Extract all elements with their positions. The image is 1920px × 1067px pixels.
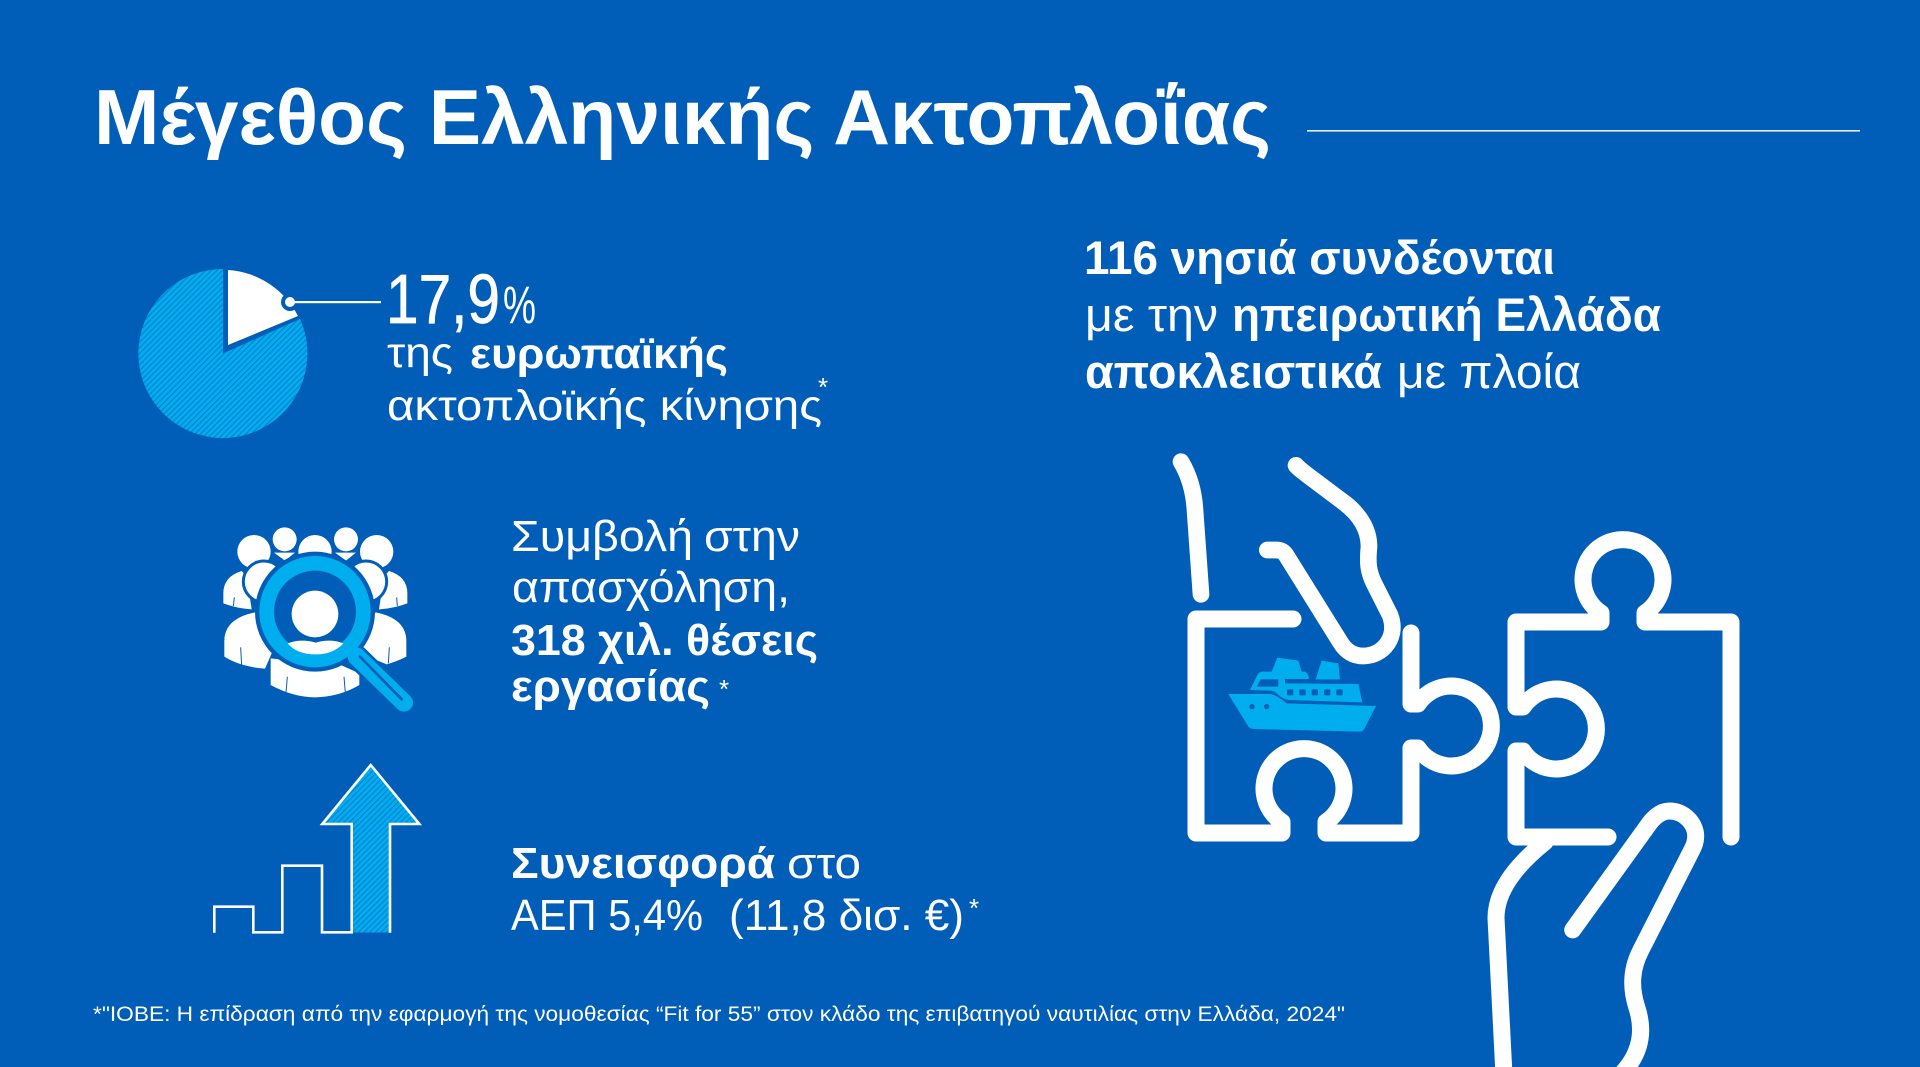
- icon: ferry ship: [1228, 658, 1376, 732]
- text block: European share: της: [387, 329, 453, 377]
- title: Μέγεθος Ελληνικής Ακτοπλοΐας: [94, 73, 1271, 161]
- text block: employment: απασχόληση,: [512, 563, 790, 612]
- hand: top: [1181, 462, 1392, 656]
- puzzle piece: left: [1196, 619, 1491, 833]
- hand: bottom: [1496, 811, 1696, 1067]
- footnote: *"ΙΟΒΕ: Η επίδραση από την εφαρμογή της νομοθεσίας “Fit for 55” στον κλάδο της επιβατηγού ναυτιλίας στην Ελλάδα, 2024": [93, 1003, 1345, 1026]
- text block: employment: στην: [704, 512, 800, 561]
- text block: European share: ακτοπλοϊκής κίνησης: [387, 382, 822, 430]
- illustration: hands joining puzzle pieces: [1181, 462, 1731, 1067]
- icon: growth arrow with steps: [214, 765, 419, 933]
- text block: GDP contribution: ΑΕΠ 5,4%: [511, 891, 703, 940]
- text block: employment: Συμβολή: [511, 512, 693, 561]
- text block: GDP contribution: Συνεισφορά: [511, 839, 775, 888]
- icon: people under magnifier: [223, 527, 407, 703]
- text block: employment: 318 χιλ. θέσεις: [511, 616, 818, 665]
- puzzle piece: right: [1516, 540, 1731, 837]
- text block: islands heading: ηπειρωτική Ελλάδα: [1232, 288, 1661, 341]
- text block: islands heading: αποκλειστικά: [1085, 345, 1382, 398]
- text block: European share: *: [818, 372, 828, 402]
- pie chart: 17.9% share: [138, 269, 381, 438]
- text block: islands heading: [1084, 231, 1661, 398]
- text block: employment: εργασίας: [511, 662, 710, 711]
- text block: GDP contribution: στο: [787, 839, 861, 888]
- text block: European share: %: [503, 276, 536, 335]
- text block: GDP contribution: (11,8 δισ. €): [729, 891, 964, 940]
- text block: GDP contribution: [511, 839, 979, 940]
- text block: employment: [511, 512, 818, 711]
- text block: employment: *: [719, 674, 729, 704]
- text block: islands heading: με την: [1085, 288, 1218, 341]
- text block: GDP contribution: *: [969, 893, 979, 923]
- text block: islands heading: με πλοία: [1397, 345, 1581, 398]
- text block: European share: ευρωπαϊκής: [470, 330, 728, 378]
- text block: European share: 17,9: [386, 260, 500, 338]
- text block: European share: [386, 260, 828, 430]
- text block: islands heading: 116 νησιά συνδέονται: [1084, 231, 1555, 284]
